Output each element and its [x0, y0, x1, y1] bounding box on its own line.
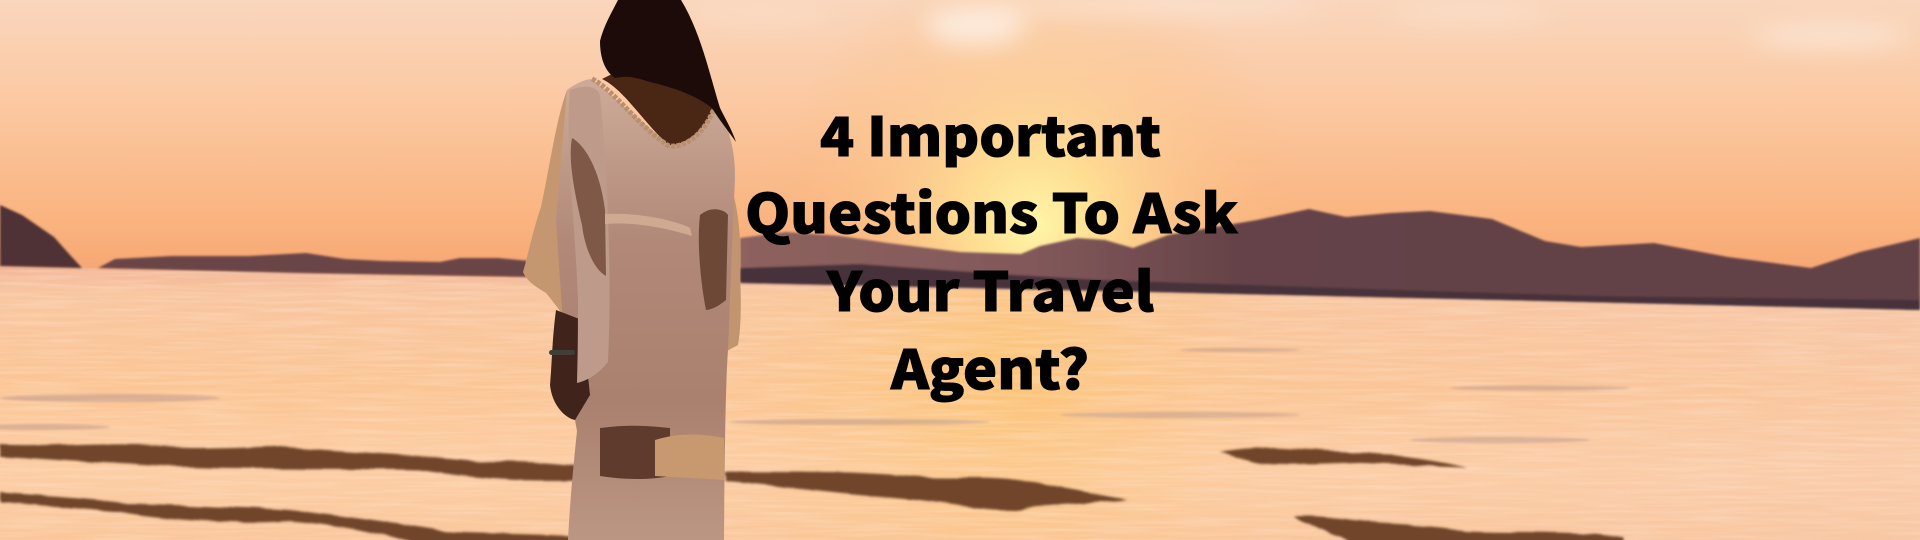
dress body — [556, 79, 735, 540]
hair — [600, 0, 736, 142]
wave: lower right — [1293, 517, 1625, 540]
arm — [550, 310, 590, 420]
shoulder lace panel — [571, 138, 606, 276]
title line 4: Agent? — [890, 326, 1089, 405]
sky — [0, 0, 1920, 320]
distant island — [98, 253, 530, 277]
bare back — [602, 70, 715, 145]
wave: lower left — [0, 493, 570, 540]
title — [745, 93, 1238, 405]
title line 2: Questions To Ask — [745, 170, 1238, 249]
clouds — [690, 0, 1910, 47]
bracelet — [549, 350, 575, 355]
title line 3: Your Travel — [826, 248, 1154, 327]
wave: far left — [0, 444, 580, 481]
waves — [0, 444, 1625, 540]
water — [0, 266, 1920, 540]
woman figure — [523, 0, 741, 540]
inner right sleeve panel — [699, 209, 728, 310]
right mountains — [740, 209, 1920, 310]
neckline lace — [592, 79, 716, 146]
left headland — [0, 205, 82, 268]
wave: right — [1220, 448, 1466, 467]
right sleeve edge — [715, 180, 741, 352]
hem panel dark — [600, 426, 670, 479]
far sleeve: translucent — [523, 90, 600, 341]
hem panel light — [655, 434, 724, 480]
outer sleeve — [569, 87, 610, 383]
wave: centre — [725, 471, 1128, 510]
title line 1: 4 Important — [820, 93, 1161, 172]
waist band — [605, 214, 692, 236]
